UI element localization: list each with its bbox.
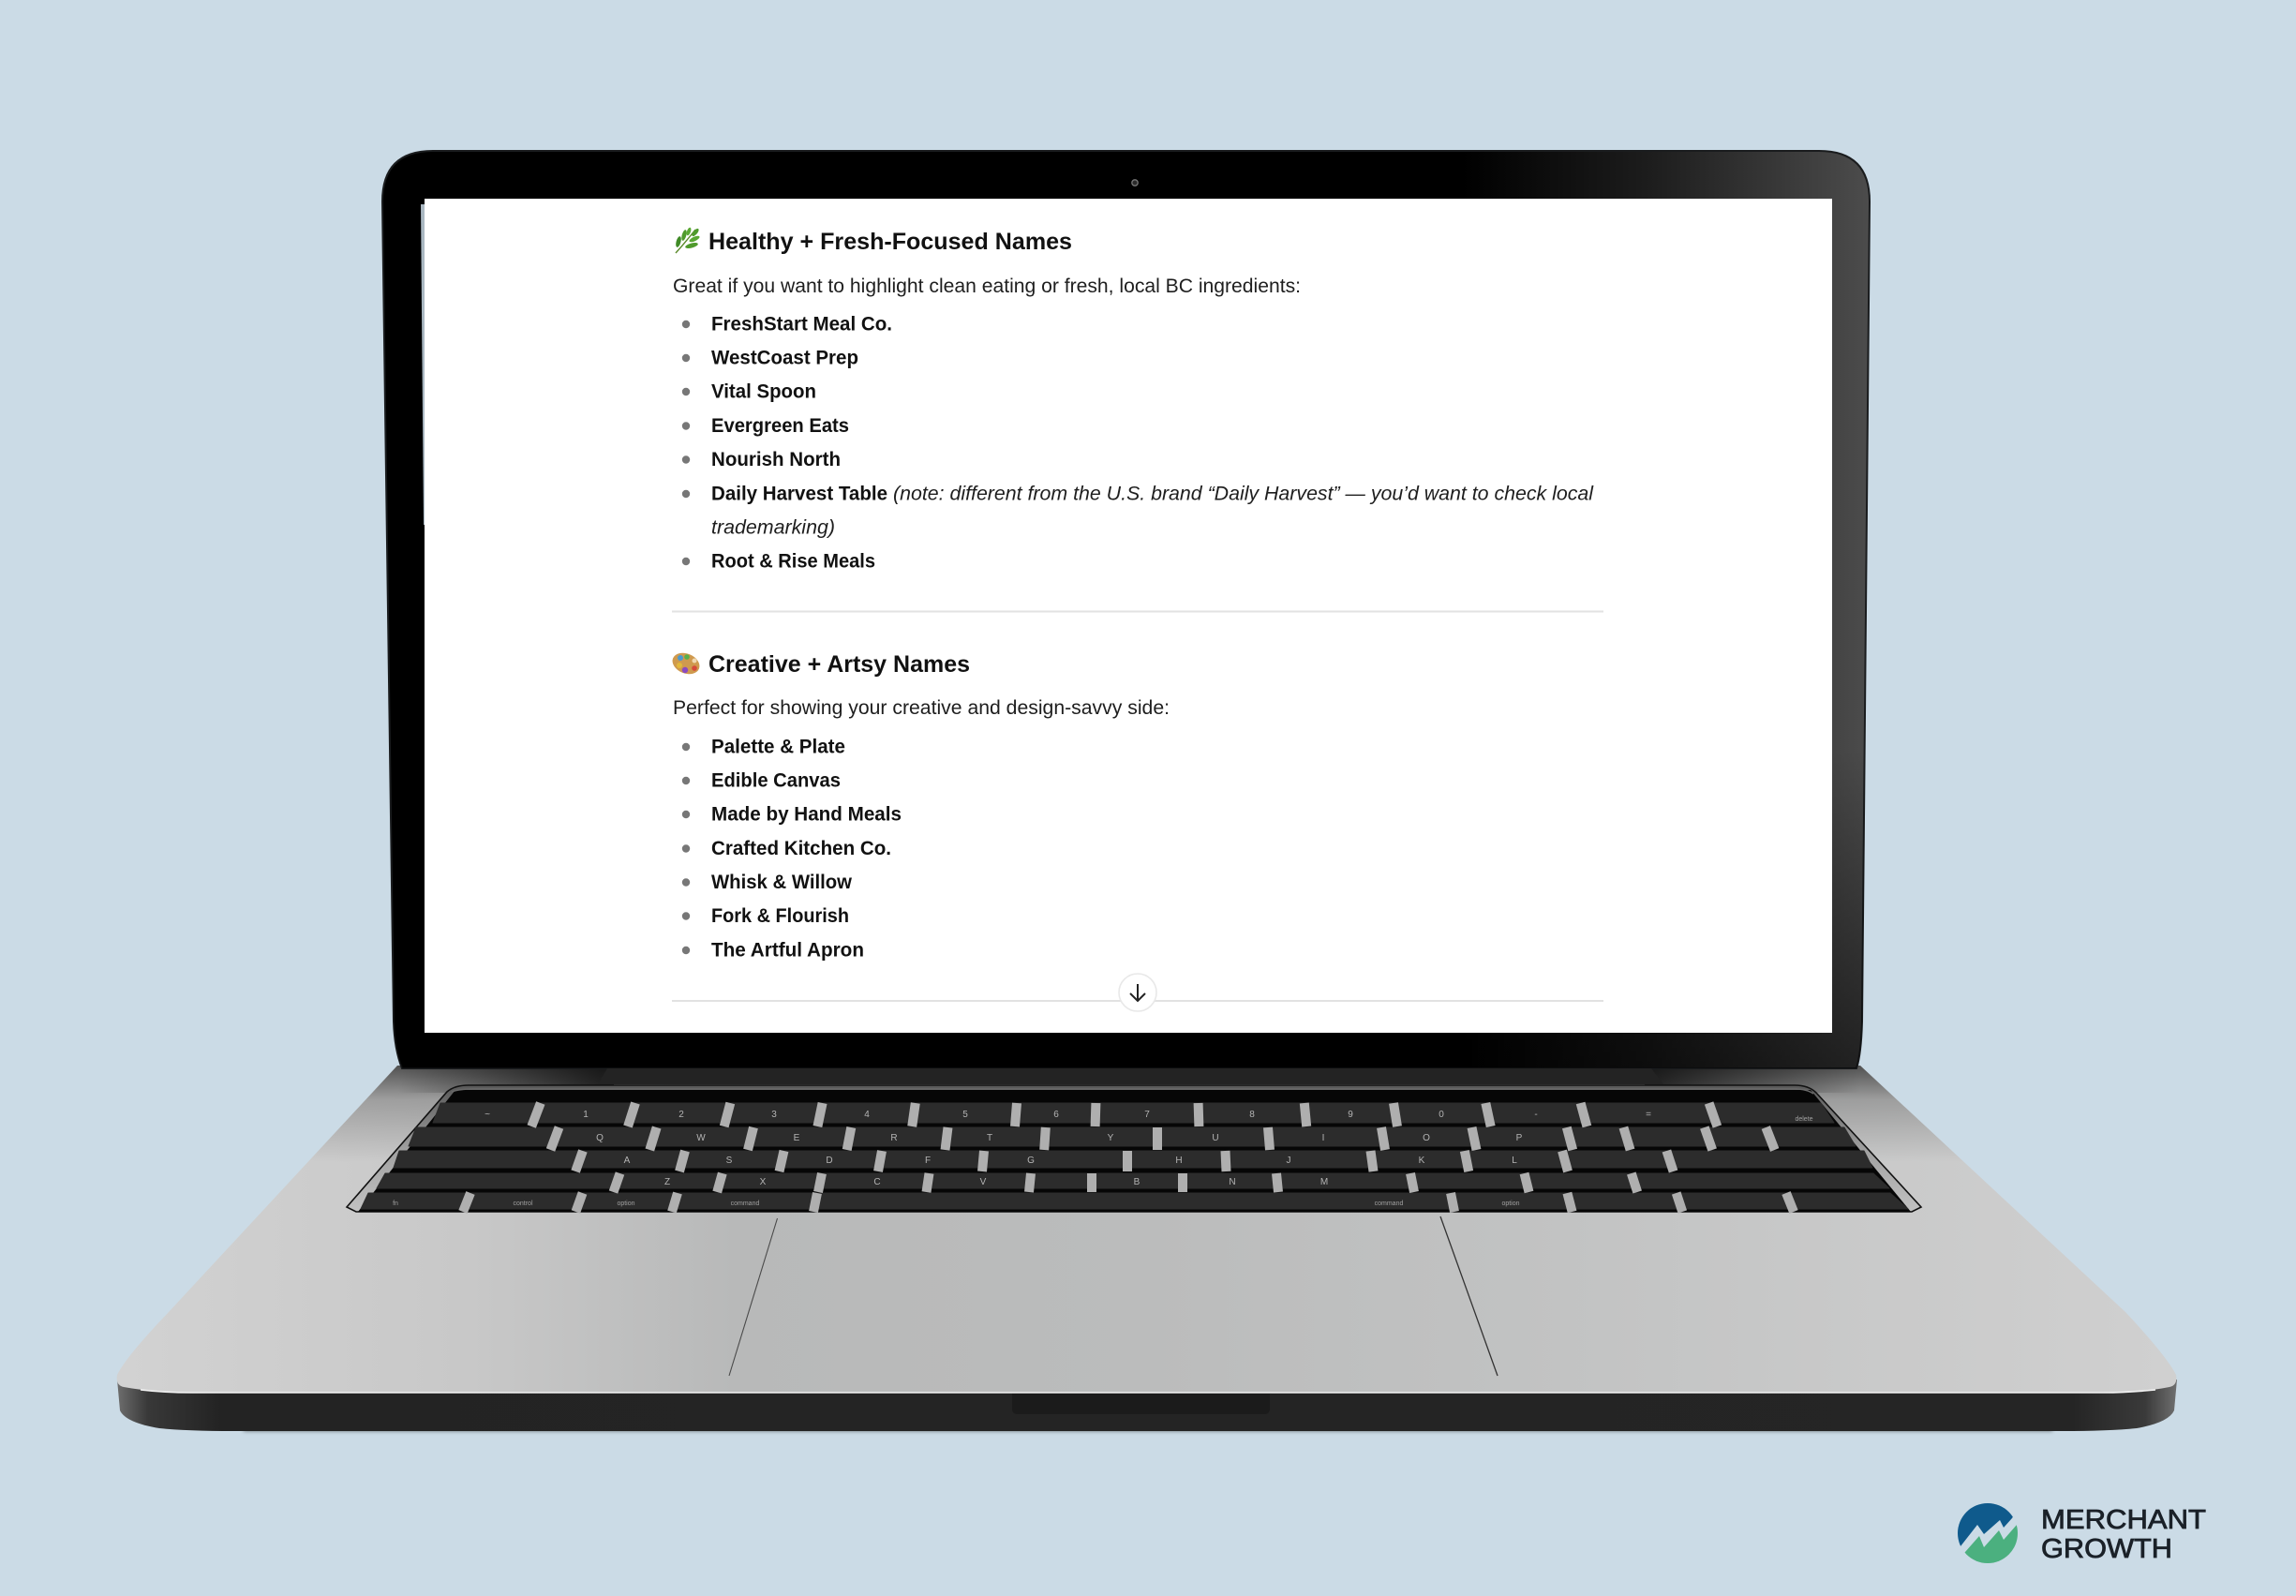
key legends: B — [1134, 1177, 1141, 1187]
key legends: S — [726, 1156, 733, 1166]
key legends: - — [1534, 1110, 1538, 1120]
key legends: W — [696, 1133, 706, 1143]
deck edge highlight — [141, 1390, 2155, 1393]
trackpad right edge — [1440, 1216, 1498, 1376]
list: creative names: Crafted Kitchen Co. — [711, 838, 891, 859]
key legends: E — [794, 1133, 800, 1143]
list: creative names: Edible Canvas — [711, 770, 841, 791]
key legends: 9 — [1348, 1110, 1353, 1120]
list: creative names: Fork & Flourish — [711, 905, 849, 927]
key legends: A — [624, 1156, 631, 1166]
laptop base shadow — [244, 1424, 2052, 1431]
key legends: O — [1423, 1133, 1430, 1143]
key legends: D — [826, 1156, 833, 1166]
list: healthy names: Nourish North — [711, 449, 841, 470]
list: creative names: The Artful Apron — [711, 939, 864, 962]
key legends: option — [1501, 1201, 1520, 1207]
key legends: X — [760, 1177, 767, 1187]
key legends: F — [925, 1156, 931, 1166]
key legends: J — [1286, 1156, 1291, 1166]
key legends: 0 — [1439, 1110, 1444, 1120]
key legends: 5 — [962, 1110, 968, 1120]
logo wordmark: MERCHANT — [2041, 1505, 2206, 1535]
key legends: fn — [393, 1201, 398, 1207]
key legends: 7 — [1144, 1110, 1150, 1120]
front notch — [1012, 1391, 1282, 1414]
list: healthy names: Daily Harvest Table — [711, 484, 887, 504]
icon: herb leaf — [675, 227, 700, 253]
intro: creative: Perfect for showing your creative and design-savvy side: — [673, 697, 1170, 719]
icon: artist palette — [669, 649, 703, 678]
key legends: P — [1516, 1133, 1523, 1143]
laptop — [117, 151, 2177, 1431]
trackpad left edge — [729, 1218, 778, 1376]
key legends: 1 — [583, 1110, 589, 1120]
list: creative names: Made by Hand Meals — [711, 804, 902, 825]
key legends: Q — [596, 1133, 604, 1143]
key legends: H — [1175, 1156, 1183, 1166]
list: healthy names: Evergreen Eats — [711, 415, 849, 437]
keyboard inner — [358, 1090, 1911, 1212]
list: creative names: Whisk & Willow — [711, 872, 853, 893]
list: healthy names: trademarking) — [711, 517, 835, 538]
key legends: T — [987, 1133, 992, 1143]
screen — [425, 199, 1832, 1033]
laptop lid — [382, 151, 1870, 1068]
list: healthy names: WestCoast Prep — [711, 347, 858, 369]
key legends: 3 — [771, 1110, 777, 1120]
section: creative names — [669, 649, 1170, 962]
list: healthy names: Root & Rise Meals — [711, 551, 875, 572]
key legends: R — [890, 1133, 898, 1143]
key legends: 8 — [1249, 1110, 1255, 1120]
logo mark — [1958, 1503, 2018, 1563]
key legends: option — [617, 1201, 635, 1207]
key legends: M — [1320, 1177, 1328, 1187]
key legends: 6 — [1053, 1110, 1059, 1120]
key legends: Y — [1108, 1133, 1114, 1143]
key legends: L — [1512, 1156, 1517, 1166]
key legends: N — [1229, 1177, 1236, 1187]
list: creative names — [682, 737, 902, 962]
list: healthy names — [682, 313, 1594, 572]
key rows — [361, 1103, 1908, 1209]
key legends: control — [513, 1201, 533, 1207]
heading: healthy: Healthy + Fresh-Focused Names — [708, 229, 1072, 255]
keyboard well — [347, 1085, 1921, 1212]
laptop front edge — [117, 1380, 2177, 1431]
key legends: K — [1419, 1156, 1425, 1166]
key legends: G — [1027, 1156, 1035, 1166]
list: healthy names: (note: different from the U.S. brand “Daily Harvest” — you’d want to check local — [893, 484, 1594, 504]
logo wordmark: GROWTH — [2041, 1534, 2172, 1564]
key legends — [393, 1110, 1813, 1207]
list: creative names: Palette & Plate — [711, 737, 845, 757]
key legends: 2 — [678, 1110, 684, 1120]
list: healthy names: Vital Spoon — [711, 380, 816, 403]
laptop base deck — [117, 1066, 2176, 1393]
logo: merchant growth — [1958, 1503, 2206, 1563]
key legends: ~ — [485, 1110, 490, 1120]
key legends: Z — [664, 1177, 670, 1187]
keyboard — [347, 1085, 1921, 1212]
screen edge sliver — [421, 204, 425, 525]
key legends: command — [731, 1201, 759, 1207]
key legends: 4 — [864, 1110, 870, 1120]
lid lower fade — [394, 750, 1866, 1068]
scroll down button — [1119, 974, 1156, 1011]
key gaps — [463, 1103, 1794, 1212]
logo wordmark — [2041, 1505, 2206, 1564]
webcam — [1132, 180, 1138, 186]
hinge bar — [598, 1068, 1663, 1084]
key legends: delete — [1795, 1116, 1813, 1123]
key legends: I — [1322, 1133, 1324, 1143]
deck top shading — [320, 1066, 1951, 1151]
list: healthy names: FreshStart Meal Co. — [711, 313, 892, 336]
key legends: U — [1212, 1133, 1219, 1143]
key legends: V — [980, 1177, 987, 1187]
key legends: command — [1375, 1201, 1403, 1207]
heading: creative: Creative + Artsy Names — [708, 651, 970, 678]
well highlight — [452, 1089, 1813, 1094]
key legends: C — [873, 1177, 881, 1187]
key legends: = — [1646, 1110, 1651, 1120]
intro: healthy: Great if you want to highlight clean eating or fresh, local BC ingredients: — [673, 276, 1301, 297]
section: healthy names — [673, 227, 1594, 572]
